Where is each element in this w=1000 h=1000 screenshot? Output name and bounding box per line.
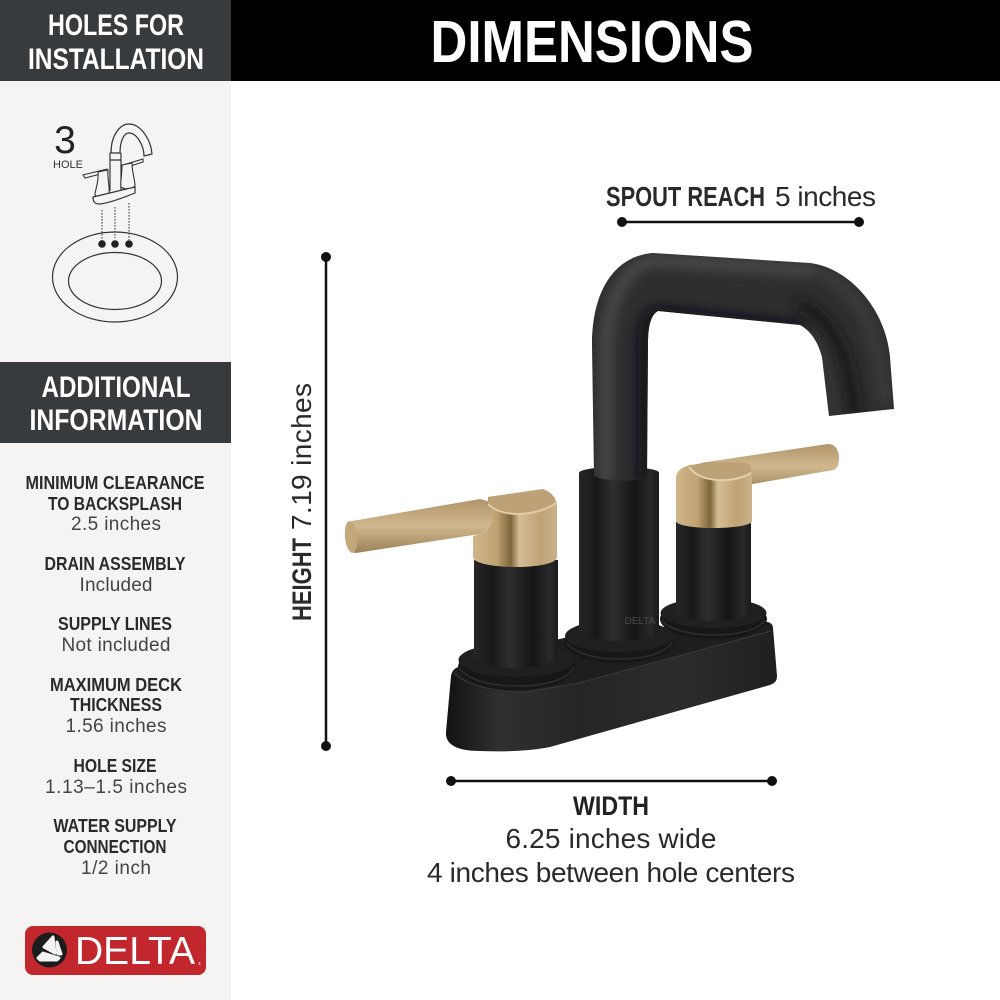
text: supply lines: SUPPLY LINES xyxy=(58,614,172,634)
icon: 3 hole faucet and sink diagram xyxy=(52,119,178,322)
heading: holes for installation: HOLES FOR xyxy=(48,9,184,42)
centre body xyxy=(579,467,659,641)
label: width xyxy=(427,791,795,888)
left lever xyxy=(345,499,495,553)
label: width: WIDTH xyxy=(573,791,649,821)
left gold cap xyxy=(473,489,557,567)
heading: holes for installation: INSTALLATION xyxy=(28,43,204,76)
left flange xyxy=(458,643,575,690)
text: hole size: HOLE SIZE xyxy=(74,756,156,776)
text: hole size xyxy=(45,756,187,798)
logo: delta: DELTA xyxy=(75,930,195,973)
right lever xyxy=(700,444,839,490)
text: minimum clearance: TO BACKSPLASH xyxy=(48,494,182,514)
right body xyxy=(676,522,751,621)
logo: delta: ® xyxy=(198,961,201,966)
text: drain assembly: DRAIN ASSEMBLY xyxy=(44,554,186,574)
text: maximum deck thickness xyxy=(50,675,182,737)
text: water supply connection: 1/2 inch xyxy=(81,858,151,879)
text: supply lines xyxy=(58,614,172,656)
text: maximum deck thickness: THICKNESS xyxy=(70,695,162,715)
text: water supply connection xyxy=(54,816,176,879)
text: minimum clearance: MINIMUM CLEARANCE xyxy=(26,473,204,493)
label: spout reach: SPOUT REACH xyxy=(606,181,765,212)
text: minimum clearance xyxy=(26,473,204,535)
image: faucet xyxy=(343,245,905,751)
text: water supply connection: WATER SUPPLY xyxy=(54,816,176,836)
faucet brand mark: DELTA xyxy=(625,616,656,627)
logo: delta xyxy=(25,926,206,975)
text: drain assembly xyxy=(44,554,186,596)
text: drain assembly: Included xyxy=(80,575,152,596)
text: water supply connection: CONNECTION xyxy=(64,837,166,857)
arrow: height dimension line xyxy=(321,252,331,751)
label: height: 7.19 inches xyxy=(286,383,317,530)
label: height: HEIGHT xyxy=(287,538,317,621)
arrow: width dimension line xyxy=(446,776,777,786)
deck plate top face xyxy=(453,622,772,692)
text: minimum clearance: 2.5 inches xyxy=(71,514,161,535)
icon: 3 hole faucet and sink diagram: 3 xyxy=(54,119,76,162)
heading: holes for installation xyxy=(0,0,231,81)
text: maximum deck thickness: 1.56 inches xyxy=(66,716,166,737)
title: dimensions xyxy=(231,0,1000,81)
centre flange xyxy=(564,620,674,663)
left body xyxy=(474,560,558,668)
label: width: 4 inches between hole centers xyxy=(427,857,795,888)
text: maximum deck thickness: MAXIMUM DECK xyxy=(50,675,182,695)
spout xyxy=(592,253,894,480)
right flange xyxy=(660,598,767,639)
panel: sidebar xyxy=(0,81,231,1000)
icon: 3 hole faucet and sink diagram: HOLE xyxy=(53,159,83,171)
label: width: 6.25 inches wide xyxy=(506,823,716,854)
label: spout reach: 5 inches xyxy=(775,181,876,212)
right gold cap xyxy=(676,462,752,528)
heading: additional information xyxy=(0,362,231,443)
heading: additional information: ADDITIONAL xyxy=(42,371,190,404)
title: dimensions: DIMENSIONS xyxy=(430,9,754,75)
arrow: spout reach dimension line xyxy=(617,217,864,227)
text: hole size: 1.13–1.5 inches xyxy=(45,777,187,798)
label: height xyxy=(286,383,317,621)
deck plate front face xyxy=(446,622,777,751)
text: supply lines: Not included xyxy=(62,635,170,656)
heading: additional information: INFORMATION xyxy=(30,404,202,437)
